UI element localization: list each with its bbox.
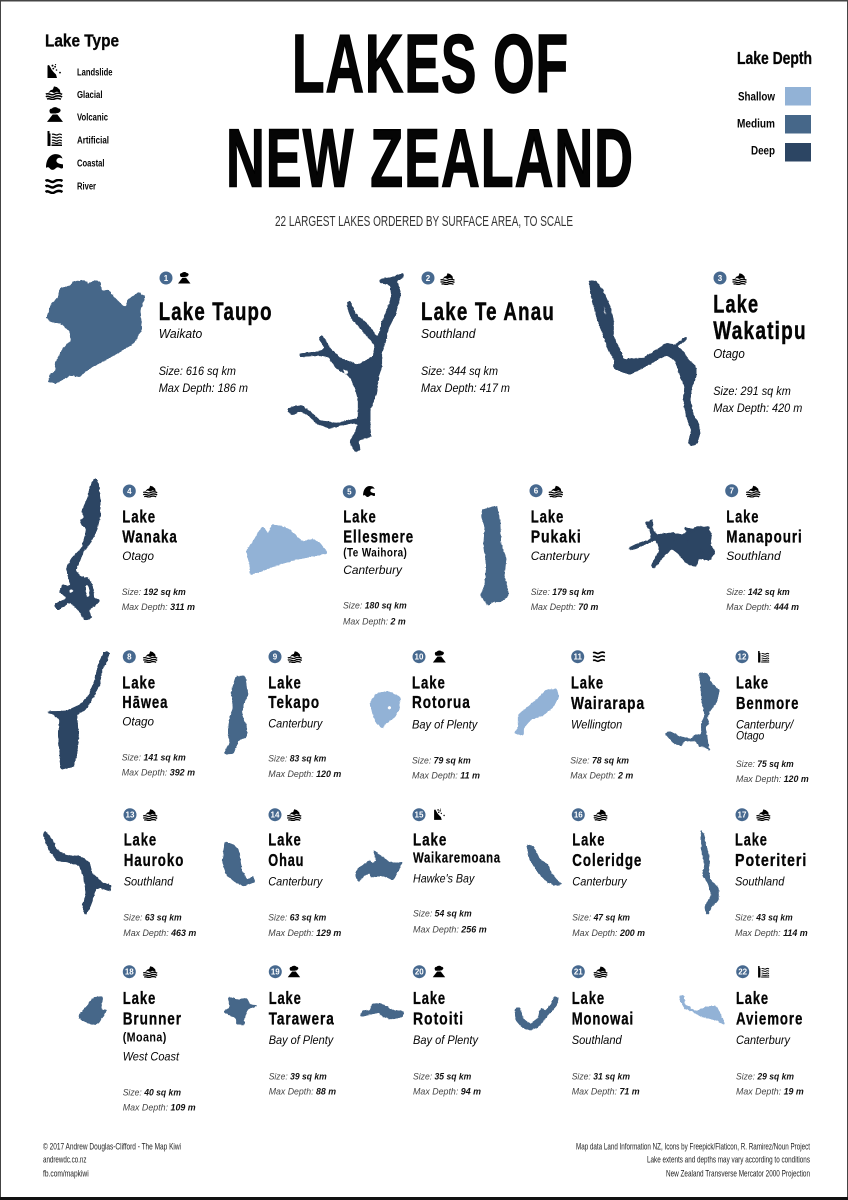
name: Lake [713,291,759,319]
stats [531,587,599,613]
name [413,988,464,1028]
region: Canterbury [268,875,323,889]
stats [343,601,407,627]
name: Wanaka [122,526,178,546]
name: Lake [343,507,377,527]
stats: Max Depth: 186 m [159,383,248,395]
number badge 10: 10 [415,653,424,662]
shape: Ohau [223,842,255,886]
name [571,672,645,713]
shape: Manapouri [628,518,715,569]
name: Lake [412,672,446,692]
shape: Monowai [515,997,558,1030]
name [122,672,168,712]
name [572,830,642,870]
number badge 18 [123,965,136,978]
number badge 8: 8 [127,653,132,662]
region: Southland [735,875,785,889]
number badge 7: 7 [729,487,734,496]
icon: glacial [746,486,760,497]
stats [123,1087,196,1114]
lake 16: Coleridge [527,808,646,939]
icon: coastal [363,486,375,497]
name: Lake [122,507,156,527]
stats: Size: 83 sq km [268,754,327,765]
stats [736,1071,804,1098]
legend item: river [46,180,96,193]
stats: Size: 54 sq km [413,909,472,920]
lake 7: Manapouri [628,484,803,613]
stats: Max Depth: 11 m [412,770,481,781]
legend item: glacial: Glacial [77,90,103,101]
name [412,672,471,712]
stats: Max Depth: 200 m [572,928,646,939]
icon: glacial [594,966,607,977]
stats: Size: 63 sq km [268,913,327,924]
name: Rotorua [412,692,471,712]
shape: Tekapo [224,676,248,754]
region: Southland [572,1033,622,1047]
shape: Tarawera [223,997,258,1024]
icon: glacial [756,809,770,820]
region: Canterbury [268,716,323,730]
lake 3: Wakatipu [589,272,807,446]
name [269,988,335,1028]
stats [268,913,342,939]
stats [572,913,646,939]
icon: volcanic [433,966,445,977]
region: Canterbury [531,549,590,563]
legend: lake type [45,30,119,193]
stats [413,1071,482,1098]
shape: Wanaka [54,478,100,620]
stats [570,755,634,781]
stats [572,1071,640,1098]
number badge 8 [123,650,136,663]
name: Lake [122,672,156,692]
legend item: river: River [77,182,96,192]
stats: Size: 39 sq km [269,1071,327,1082]
stats [713,386,803,415]
stats [726,587,800,613]
legend item: landslide: Landslide [77,68,113,78]
number badge 6: 6 [534,487,539,496]
legend item: landslide [48,64,113,78]
icon: landslide [434,809,445,820]
stats: Size: 141 sq km [122,752,186,763]
name: Ohau [268,850,304,870]
stats: Size: 79 sq km [412,755,471,766]
number badge 19: 19 [271,968,280,977]
stats: Size: 43 sq km [735,913,793,924]
name: Lake [571,672,604,692]
legend item: shallow: Shallow [738,90,776,104]
name: Wairarapa [571,693,645,713]
shape: Brunner [79,997,107,1024]
icon: glacial [594,809,607,820]
number badge 3 [714,272,726,284]
name: Lake [413,988,446,1008]
number badge 1 [160,272,172,284]
name: Poteriteri [735,850,807,870]
region: Canterbury/ [736,717,795,731]
name: Manapouri [726,526,803,546]
name: Lake [269,988,302,1008]
name [572,988,634,1028]
stats: Max Depth: 70 m [531,602,599,613]
icon: volcanic [178,272,190,284]
name: Coleridge [572,850,642,870]
number badge 16: 16 [574,811,583,820]
name: Tarawera [269,1008,335,1028]
shape: Coleridge [527,844,562,886]
lake 18: Brunner [79,965,196,1114]
number badge 17: 17 [738,811,747,820]
number badge 2 [422,272,434,284]
number badge 1: 1 [164,274,169,283]
name [124,830,184,870]
stats [123,913,197,939]
lake 8: Hawea [46,650,196,779]
name: Lake [124,830,157,850]
name [413,830,501,867]
region: Bay of Plenty [413,1033,479,1047]
name: Lake [572,830,605,850]
stats: Size: 344 sq km [421,366,498,378]
icon: glacial [143,486,157,497]
region: Otago [122,715,154,729]
stats: Size: 29 sq km [736,1071,794,1082]
number badge 13 [124,808,136,821]
lake 12: Benmore [665,650,809,785]
stats: Max Depth: 19 m [736,1087,804,1098]
icon: artificial [758,651,769,663]
icon: glacial [732,273,746,285]
footer: credits right [576,1142,810,1180]
number badge 18: 18 [125,968,134,977]
stats: Size: 31 sq km [572,1071,630,1082]
stats [413,909,487,935]
stats: Size: 291 sq km [713,386,791,398]
lake 21: Monowai [515,965,640,1098]
number badge 20: 20 [415,968,424,977]
number badge 21: 21 [574,968,583,977]
region: Waikato [159,326,202,341]
number badge 14: 14 [271,811,280,820]
number badge 4: 4 [127,487,132,496]
stats: Size: 179 sq km [531,587,594,598]
icon: glacial [143,809,157,821]
stats: Max Depth: 392 m [122,768,196,779]
icon: volcanic [433,651,446,662]
region: Canterbury [343,563,403,577]
name [268,672,320,712]
name: Lake [123,988,156,1008]
number badge 12: 12 [738,653,747,662]
name: Hāwea [122,692,168,712]
stats: Max Depth: 94 m [413,1087,482,1098]
lake 17: Poteriteri [701,808,808,939]
title: LAKES OF [292,17,569,110]
icon: glacial [143,651,157,663]
legend item: artificial [48,131,109,146]
stats: Max Depth: 420 m [713,403,803,415]
lake 4: Wanaka [54,478,196,620]
name: Aviemore [736,1008,803,1028]
icon: glacial [549,486,563,497]
name: Tekapo [268,692,320,712]
region [736,717,795,743]
region: Bay of Plenty [269,1033,334,1047]
number badge 13: 13 [126,811,135,820]
number badge 15: 15 [415,811,424,820]
name [726,507,803,546]
icon: glacial [440,273,454,285]
number badge 9: 9 [273,653,278,662]
stats: Size: 78 sq km [570,755,629,766]
name [122,507,178,546]
shape: Wakatipu [589,281,700,446]
legend heading: lake type: Lake Type [45,30,119,50]
lake 11: Wairarapa [515,650,645,781]
legend item: medium: Medium [737,116,775,130]
footer: credits left: fb.com/mapkiwi [43,1168,89,1180]
region: Southland [124,875,174,889]
shape: Pukaki [481,506,508,606]
name: Brunner [123,1008,182,1028]
stats [122,752,196,779]
name: Rotoiti [413,1008,464,1028]
name: Lake [268,830,302,850]
region: Otago [713,346,745,361]
stats: Size: 142 sq km [726,587,790,598]
icon: volcanic [288,966,300,977]
name [123,988,182,1045]
lake 19: Tarawera [223,965,337,1098]
icon: glacial [287,809,301,821]
shape: Hauroko [43,831,111,915]
title: NEW ZEALAND [226,112,634,204]
shape: Rotorua [370,692,400,728]
name: Lake Te Anau [421,298,555,326]
stats: Size: 47 sq km [572,913,630,924]
stats: Size: 40 sq km [123,1087,181,1098]
stats: Max Depth: 88 m [269,1087,337,1098]
lake 9: Tekapo [224,650,342,780]
icon: glacial [143,966,157,978]
shape: Waikaremoana [356,850,403,882]
name [531,507,582,546]
stats [268,754,342,780]
stats [159,366,248,395]
number badge 5 [343,485,356,498]
name: Lake [531,507,564,527]
shape: Taupo [47,281,145,383]
legend item: deep: Deep [751,144,775,158]
stats: Size: 63 sq km [123,913,182,924]
name [343,507,414,560]
lake 2: Te Anau [287,272,555,452]
shape: Poteriteri [701,829,718,916]
icon: river [593,652,605,661]
region: Hawke's Bay [413,872,475,886]
footer: credits left: © 2017 Andrew Douglas-Clifford - The Map Kiwi [43,1142,181,1152]
name: (Te Waihora) [343,548,407,560]
footer: credits left [43,1142,181,1180]
stats: Max Depth: 417 m [421,383,510,395]
name: Benmore [736,693,799,713]
region: West Coast [123,1049,180,1063]
stats [412,755,481,781]
lake 14: Ohau [223,808,342,939]
name: Lake [736,988,769,1008]
lake 20: Rotoiti [360,965,482,1098]
legend item: glacial [46,86,103,101]
name: Lake [572,988,605,1008]
number badge 2: 2 [426,274,431,283]
name [736,672,799,713]
lake 15: Waikaremoana [356,808,501,935]
stats [736,759,809,785]
legend item: volcanic: Volcanic [77,112,108,124]
region: Southland [726,549,781,563]
name [713,291,807,345]
shape: Ellesmere [247,525,327,574]
icon: glacial [288,651,302,663]
name: Lake [726,507,759,527]
number badge 5: 5 [347,488,352,497]
shape: Benmore [665,672,719,752]
name: Waikaremoana [413,851,501,867]
number badge 12 [736,650,748,663]
legend item: coastal [46,154,105,170]
name [735,830,807,870]
region: Otago [122,549,154,563]
legend item: volcanic [47,107,108,124]
name: Lake [735,830,768,850]
lake 6: Pukaki [481,484,599,613]
number badge 4 [123,484,136,498]
icon: artificial [758,966,769,978]
stats: Max Depth: 120 m [736,774,809,785]
stats: Max Depth: 109 m [123,1103,196,1114]
legend heading: lake depth: Lake Depth [737,48,812,68]
shape: Aviemore [680,995,725,1025]
stats [269,1071,337,1098]
number badge 3: 3 [718,274,723,283]
lake 5: Ellesmere [247,485,414,627]
stats: Max Depth: 256 m [413,924,487,935]
stats: Max Depth: 311 m [122,602,196,613]
lake 22: Aviemore [680,965,804,1098]
stats: Size: 616 sq km [159,366,236,378]
name: Pukaki [531,526,582,546]
number badge 15 [412,808,426,821]
name: Hauroko [124,850,184,870]
name: (Moana) [123,1030,167,1045]
region: Canterbury [736,1033,791,1047]
lake 13: Hauroko [43,808,197,939]
name: Lake Taupo [159,298,273,326]
title [226,17,634,204]
stats: Size: 192 sq km [122,587,186,598]
name [736,988,803,1028]
stats: Max Depth: 2 m [343,616,406,627]
stats [421,366,510,395]
stats [735,913,808,939]
number badge 7 [725,484,738,497]
stats: Size: 35 sq km [413,1071,472,1082]
lake 10: Rotorua [370,650,481,781]
name: Lake [413,830,447,850]
stats [122,587,196,613]
shape: Hawea [46,652,109,769]
stats: Size: 75 sq km [736,759,794,770]
region: Wellington [571,717,623,731]
shape: Wairarapa [515,689,558,735]
subtitle: 22 LARGEST LAKES ORDERED BY SURFACE AREA, TO SCALE [275,213,573,230]
number badge 11: 11 [573,653,582,662]
region: Canterbury [572,875,628,889]
legend: lake depth [737,48,812,162]
name [268,830,304,870]
name: Monowai [572,1008,634,1028]
legend item: coastal: Coastal [77,158,105,170]
stats: Max Depth: 114 m [735,928,808,939]
shape: Rotoiti [360,1003,404,1019]
stats: Max Depth: 444 m [726,602,800,613]
name: Lake [268,672,302,692]
number badge 22: 22 [738,968,748,977]
stats: Max Depth: 71 m [572,1087,640,1098]
stats: Max Depth: 120 m [268,769,342,780]
stats: Size: 180 sq km [343,601,407,612]
region: Bay of Plenty [412,717,478,731]
stats: Max Depth: 129 m [268,928,342,939]
shape: Te Anau [287,273,403,452]
stats: Max Depth: 2 m [570,770,634,781]
lake 1: Taupo [47,272,273,395]
stats: Max Depth: 463 m [123,928,197,939]
footer: credits left: andrewdc.co.nz [43,1154,87,1166]
region: Otago [736,729,765,743]
name: Ellesmere [343,526,414,546]
legend item: artificial: Artificial [77,136,109,146]
name: Wakatipu [713,317,807,345]
name: Lake [736,672,769,692]
region: Southland [421,326,476,341]
